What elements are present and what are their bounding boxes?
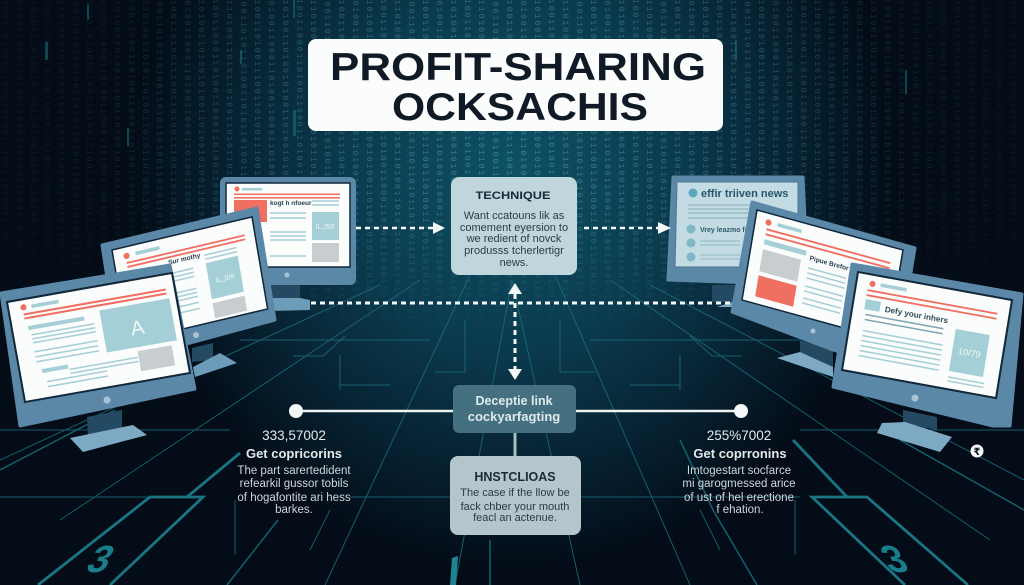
dashed connector: horizontal link between monitors <box>311 302 733 304</box>
background numerals <box>80 538 915 581</box>
monitor: front right: Defy your inhers <box>884 305 949 325</box>
panel: instructions <box>450 456 581 535</box>
text block: left statistic: 333,57002 <box>262 428 326 443</box>
panel: deceptive link <box>453 385 576 433</box>
text block: left statistic: Get copricorins <box>246 446 342 461</box>
monitor: middle left: IL,J09 <box>215 272 235 285</box>
title banner: PROFIT-SHARING <box>330 46 706 89</box>
panel: technique: TECHNIQUE <box>476 190 550 202</box>
title banner: OCKSACHIS <box>392 86 648 129</box>
connector: left node to deceptive link <box>289 404 453 418</box>
icon: currency coin: ₹ <box>974 447 981 458</box>
arrow: left monitors to technique <box>356 222 445 234</box>
monitor: middle left: Sur mothy <box>168 252 201 267</box>
title banner <box>308 39 723 131</box>
panel: instructions: HNSTCLIOAS <box>474 470 556 484</box>
panel: instructions: The case if the llow be <box>460 487 570 499</box>
panel: technique: news. <box>500 257 528 269</box>
panel: technique: comement eyersion to <box>460 222 568 234</box>
monitor: back left: kogt h nfoeur <box>270 200 312 207</box>
text block: right statistic: f ehation. <box>716 504 764 516</box>
text block: left statistic: barkes. <box>275 504 313 516</box>
text block: right statistic: of ust of hel erectione <box>684 492 794 504</box>
monitor: back right: effir triiven news <box>701 188 788 200</box>
text block: right statistic: Imtogestart socfarce <box>687 465 791 477</box>
background numerals: 3 <box>873 538 915 581</box>
panel: technique <box>451 177 577 275</box>
icon: currency coin <box>970 444 984 458</box>
monitor: front right <box>833 264 1022 452</box>
panel: technique: produsss tcherlertigr <box>464 245 564 257</box>
monitor: middle right: Pipue Brefor <box>809 255 849 273</box>
text block: left statistic: of hogafontite ari hess <box>237 492 351 504</box>
monitor: back left <box>220 177 356 311</box>
arrow: technique to right monitors <box>584 222 671 234</box>
panel: instructions: fack chber your mouth <box>461 501 569 513</box>
monitor: front right: 10/79 <box>957 346 981 360</box>
text block: left statistic: The part sarertedident <box>237 465 351 477</box>
panel: instructions: feacl an actenue. <box>473 512 557 524</box>
text block: right statistic <box>682 428 796 516</box>
arrow: vertical link technique to deceptive link <box>508 283 522 380</box>
text block: right statistic: 255%7002 <box>707 428 771 443</box>
monitor: back left: IL,J92 <box>315 224 335 231</box>
monitor: back right <box>668 177 808 307</box>
text block: right statistic: Get coprronins <box>693 446 787 461</box>
monitor: middle right <box>732 202 915 377</box>
connector: deceptive link to instructions panel <box>514 433 516 457</box>
text block: left statistic: refearkil gussor tobils <box>240 478 349 490</box>
monitor: front left: A <box>129 317 147 341</box>
monitor: middle left <box>102 208 275 377</box>
monitor: front left <box>1 265 195 452</box>
panel: deceptive link: cockyarfagting <box>468 409 560 424</box>
text block: left statistic <box>237 428 351 516</box>
panel: technique: we redient of novck <box>466 233 562 245</box>
monitor: back right: Vrey leazmo fo <box>700 227 749 234</box>
panel: technique: Want ccatouns lik as <box>464 210 565 222</box>
text block: right statistic: mi garogmessed arice <box>682 478 796 490</box>
background numerals: 3 <box>80 538 122 581</box>
connector: right node to deceptive link <box>576 404 748 418</box>
panel: deceptive link: Deceptie link <box>475 394 553 408</box>
